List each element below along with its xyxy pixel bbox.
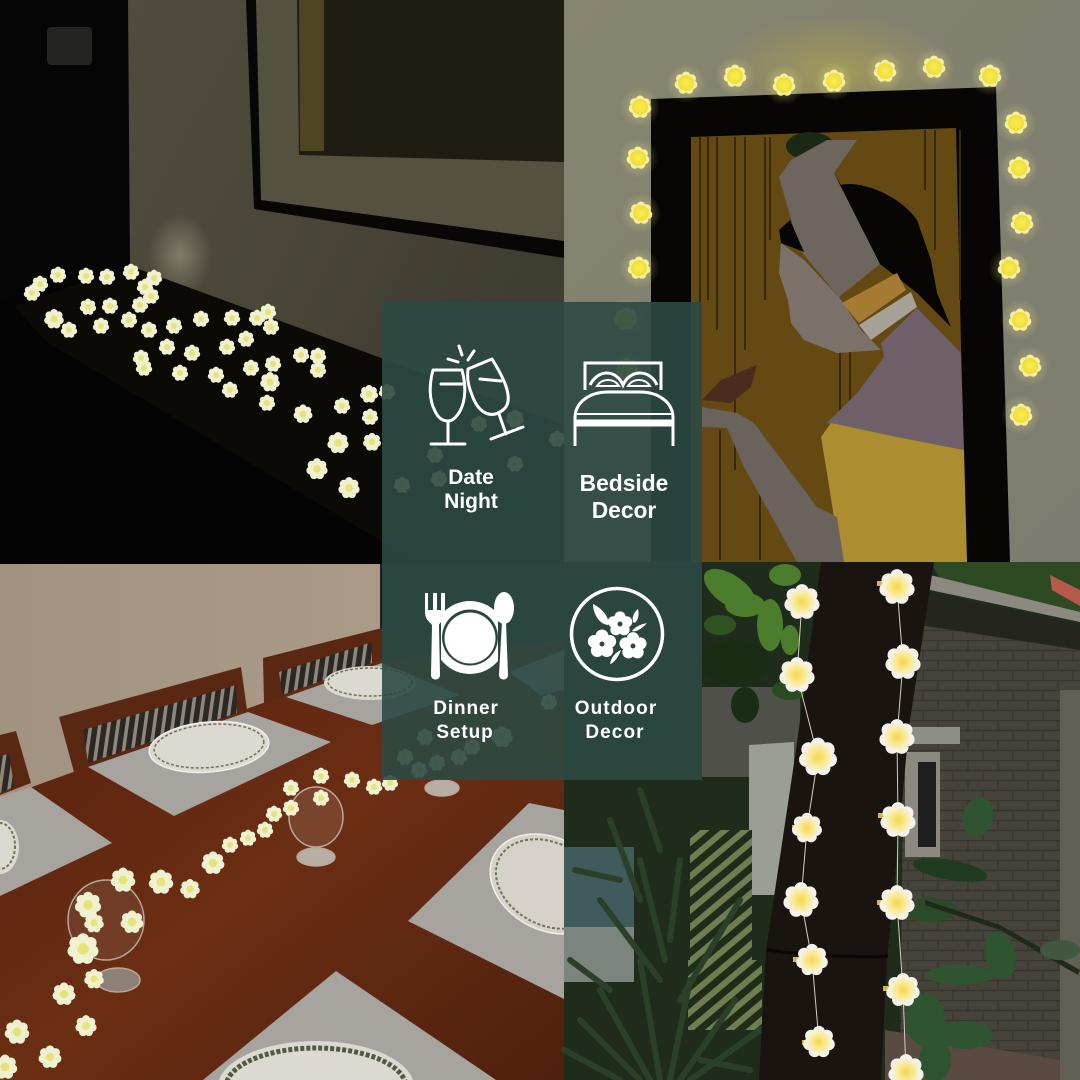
table top <box>0 640 564 1080</box>
framed picture <box>246 0 564 258</box>
raised arm <box>779 140 880 297</box>
light garden patch with palm fronds <box>690 830 752 960</box>
plates <box>0 666 625 1080</box>
painting texture and streaks <box>700 130 960 560</box>
armlet <box>842 273 906 323</box>
chairs <box>0 628 382 795</box>
label: date night: Night <box>444 490 498 513</box>
fairy lights <box>24 264 565 498</box>
flower garland <box>0 694 557 1079</box>
label: dinner setup: Setup <box>436 722 494 743</box>
label: date night: Date <box>448 466 494 489</box>
light path <box>564 927 634 982</box>
photo: sideboard with fairy lights at night <box>0 0 565 564</box>
label: dinner setup: Dinner <box>433 698 499 719</box>
painting <box>691 128 967 562</box>
area above roof <box>930 562 1080 615</box>
lower arm <box>702 407 844 562</box>
light glow on wall <box>148 213 212 297</box>
sideboard top <box>14 266 564 564</box>
window <box>905 752 940 857</box>
label: outdoor decor: Decor <box>585 722 645 743</box>
flower lights <box>779 569 924 1080</box>
label: bedside decor: Decor <box>592 497 656 523</box>
hair <box>834 173 951 327</box>
dark foliage at top of painting <box>786 132 834 160</box>
picture frame <box>651 87 1010 562</box>
fairy wire <box>797 587 906 1072</box>
door <box>0 0 130 300</box>
dark doorway behind the table <box>380 564 564 674</box>
photo: dining table setting <box>0 564 625 1080</box>
icon: flowers in a circle <box>572 588 662 680</box>
icon: champagne glasses <box>430 346 523 444</box>
roof eave <box>930 575 1080 622</box>
patterned armlet <box>859 292 917 340</box>
glass vases <box>68 780 459 992</box>
palm fronds <box>564 790 760 1080</box>
foreground leaves <box>902 794 1080 1080</box>
blue background <box>564 847 634 927</box>
warm glow above frame <box>715 15 955 125</box>
wall <box>126 0 564 425</box>
oil lamp <box>702 365 757 403</box>
red roof tiles <box>1050 575 1080 606</box>
hair over forehead <box>779 220 804 252</box>
panel: use cases overlay <box>382 302 702 780</box>
wall switch <box>47 27 92 65</box>
icon: bed <box>575 363 673 446</box>
trunk ring <box>767 950 888 957</box>
shadow under eave <box>920 590 1080 650</box>
label: bedside decor: Bedside <box>580 470 668 496</box>
string of yellow flower lights <box>606 47 1050 435</box>
clips on the lights <box>792 581 892 1045</box>
window lintel <box>905 727 960 744</box>
white column <box>749 742 794 895</box>
label: outdoor decor: Outdoor <box>575 698 657 719</box>
photo: framed painting with flower lights <box>564 0 1080 562</box>
icon: plate with fork and spoon <box>425 592 514 680</box>
placemats <box>0 650 564 1080</box>
bright leaves <box>697 561 808 723</box>
photo: tree trunk with outdoor flower lights <box>564 561 1080 1080</box>
pillar <box>1060 690 1080 1080</box>
face <box>779 243 881 353</box>
house wall with brickwork <box>900 590 1080 1080</box>
torso <box>827 308 964 450</box>
yellow dress <box>821 423 967 562</box>
ground <box>885 1030 1060 1080</box>
background wall seen through trees <box>702 687 800 777</box>
tree trunk <box>759 562 934 1080</box>
lower light patch <box>688 960 762 1030</box>
